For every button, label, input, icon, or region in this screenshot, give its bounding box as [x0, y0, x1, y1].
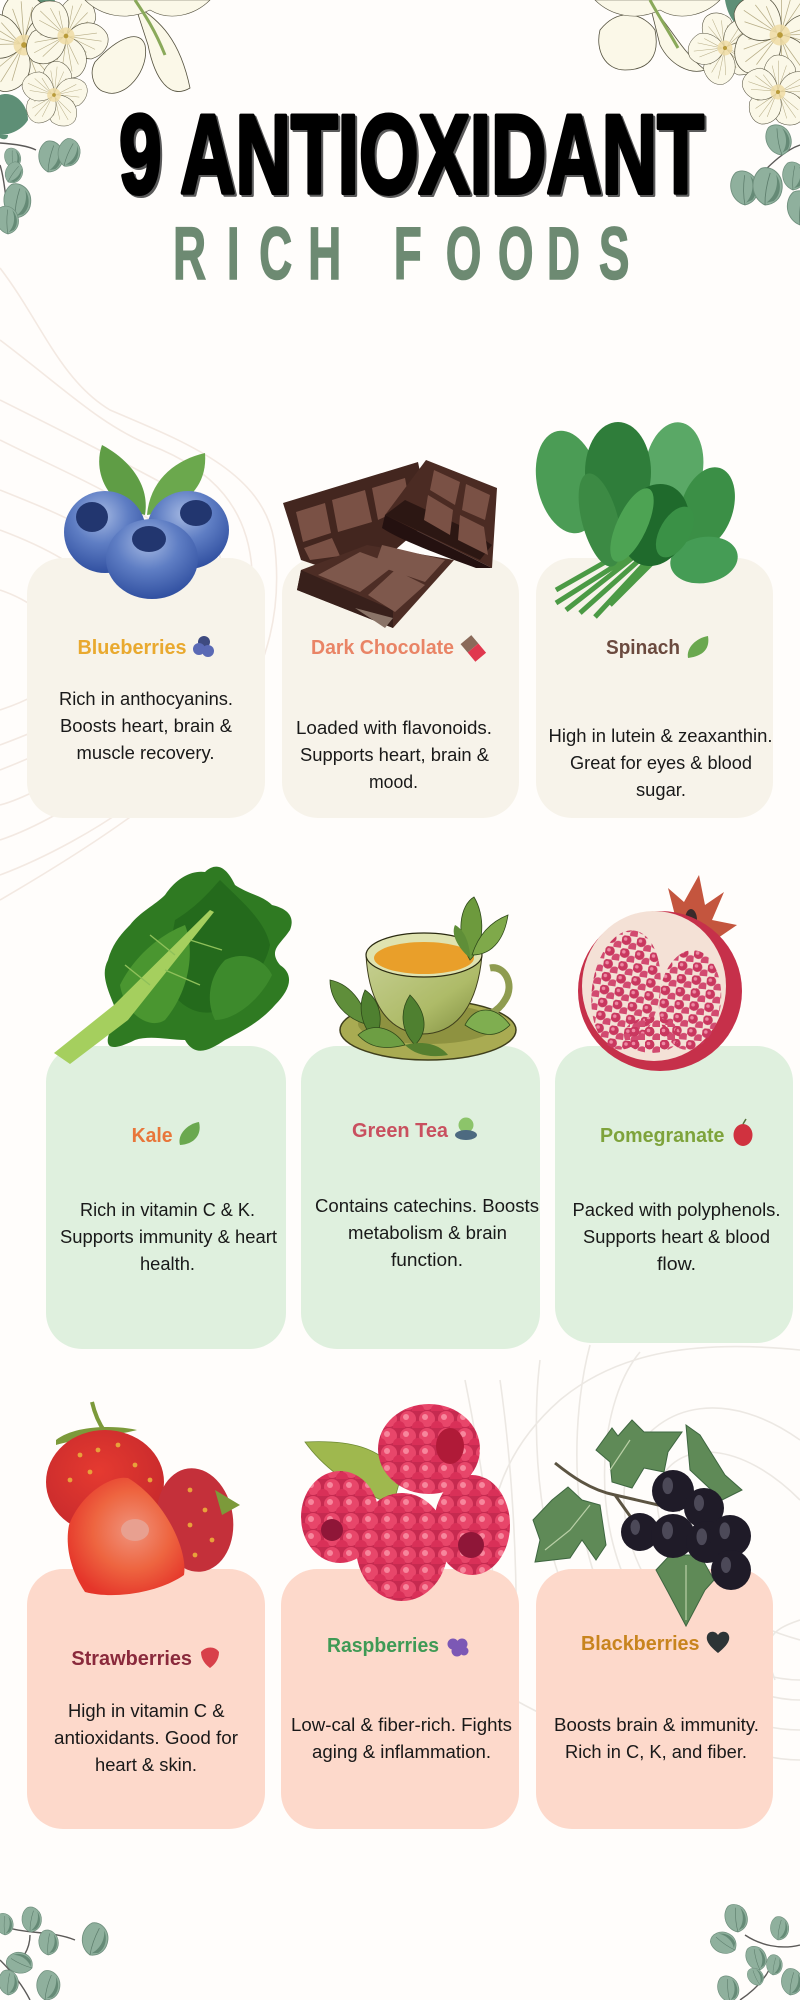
- text block: [291, 1715, 512, 1762]
- text block: sugar.: [636, 780, 686, 800]
- text block: [296, 718, 492, 792]
- text block: Rich in anthocyanins.: [59, 689, 233, 709]
- text block: [60, 1200, 277, 1274]
- text block: function.: [391, 1250, 463, 1270]
- text block: Packed with polyphenols.: [572, 1200, 780, 1220]
- panel: kale: [46, 867, 292, 1349]
- heading: Blackberries: [581, 1633, 700, 1655]
- text block: [572, 1200, 780, 1274]
- heading: Strawberries: [71, 1648, 192, 1670]
- panel: strawberries: [27, 1402, 265, 1829]
- panel: pomegranate: [555, 875, 793, 1343]
- text block: Low-cal & fiber-rich. Fights: [291, 1715, 512, 1735]
- eucalyptus: bottom left: [0, 1906, 112, 2000]
- icon: strawberry: [201, 1648, 219, 1668]
- subtitle: RICH FOODS: [173, 213, 630, 296]
- text block: Supports heart, brain &: [300, 745, 489, 765]
- text block: [315, 1196, 539, 1270]
- icon: matcha: [455, 1118, 477, 1140]
- illustration: raspberries: [301, 1404, 510, 1601]
- flowers: top right: [595, 0, 800, 134]
- eucalyptus: upper left: [0, 136, 84, 235]
- text block: [548, 726, 772, 800]
- icon: grapes: [448, 1638, 468, 1656]
- heading: Kale: [132, 1125, 173, 1147]
- text block: mood.: [369, 772, 418, 792]
- heading: Green Tea: [352, 1120, 449, 1142]
- illustration: blueberries: [64, 445, 229, 599]
- text block: flow.: [657, 1254, 696, 1274]
- text block: [54, 1701, 238, 1775]
- illustration: strawberries: [46, 1402, 240, 1595]
- text block: [554, 1715, 759, 1762]
- text block: health.: [140, 1254, 195, 1274]
- icon: blueberries: [193, 636, 214, 657]
- icon: leafy green: [179, 1122, 200, 1145]
- text block: heart & skin.: [95, 1755, 197, 1775]
- icon: leafy green: [688, 636, 708, 658]
- heading: Blueberries: [78, 637, 186, 659]
- illustration: pomegranate: [578, 875, 742, 1071]
- flowers: top left: [0, 0, 210, 139]
- illustration: blackberries: [533, 1420, 751, 1626]
- illustration: spinach: [527, 418, 745, 617]
- illustration: kale: [54, 867, 292, 1064]
- panel: spinach: [527, 418, 773, 818]
- text block: Rich in C, K, and fiber.: [565, 1742, 747, 1762]
- text block: metabolism & brain: [348, 1223, 507, 1243]
- icon: chocolate: [461, 635, 486, 662]
- text block: Great for eyes & blood: [570, 753, 752, 773]
- contour lines: left: [0, 268, 277, 900]
- text block: Rich in vitamin C & K.: [80, 1200, 255, 1220]
- text block: Supports heart & blood: [583, 1227, 770, 1247]
- text block: Boosts heart, brain &: [60, 716, 232, 736]
- text block: antioxidants. Good for: [54, 1728, 238, 1748]
- text block: aging & inflammation.: [312, 1742, 491, 1762]
- panel: green tea: [301, 897, 540, 1349]
- illustration: dark chocolate: [283, 460, 497, 628]
- text block: High in lutein & zeaxanthin.: [548, 726, 772, 746]
- panel: raspberries: [281, 1404, 519, 1829]
- illustration: green tea: [330, 897, 516, 1060]
- heading: Dark Chocolate: [311, 637, 454, 659]
- text block: [59, 689, 233, 763]
- heading: Spinach: [606, 637, 680, 659]
- contour lines: right: [465, 1345, 800, 1760]
- panel: dark chocolate: [282, 460, 519, 818]
- panel: blackberries: [533, 1420, 773, 1829]
- text block: Supports immunity & heart: [60, 1227, 277, 1247]
- text block: Boosts brain & immunity.: [554, 1715, 759, 1735]
- icon: black heart: [707, 1632, 729, 1653]
- eucalyptus: upper right: [729, 122, 800, 225]
- heading: Pomegranate: [600, 1125, 724, 1147]
- text block: Loaded with flavonoids.: [296, 718, 492, 738]
- panel: blueberries: [27, 445, 265, 818]
- icon: apple: [734, 1119, 752, 1146]
- heading: Raspberries: [327, 1635, 439, 1657]
- text block: High in vitamin C &: [68, 1701, 224, 1721]
- text block: Contains catechins. Boosts: [315, 1196, 539, 1216]
- text block: muscle recovery.: [76, 743, 214, 763]
- eucalyptus: bottom right: [707, 1902, 800, 2000]
